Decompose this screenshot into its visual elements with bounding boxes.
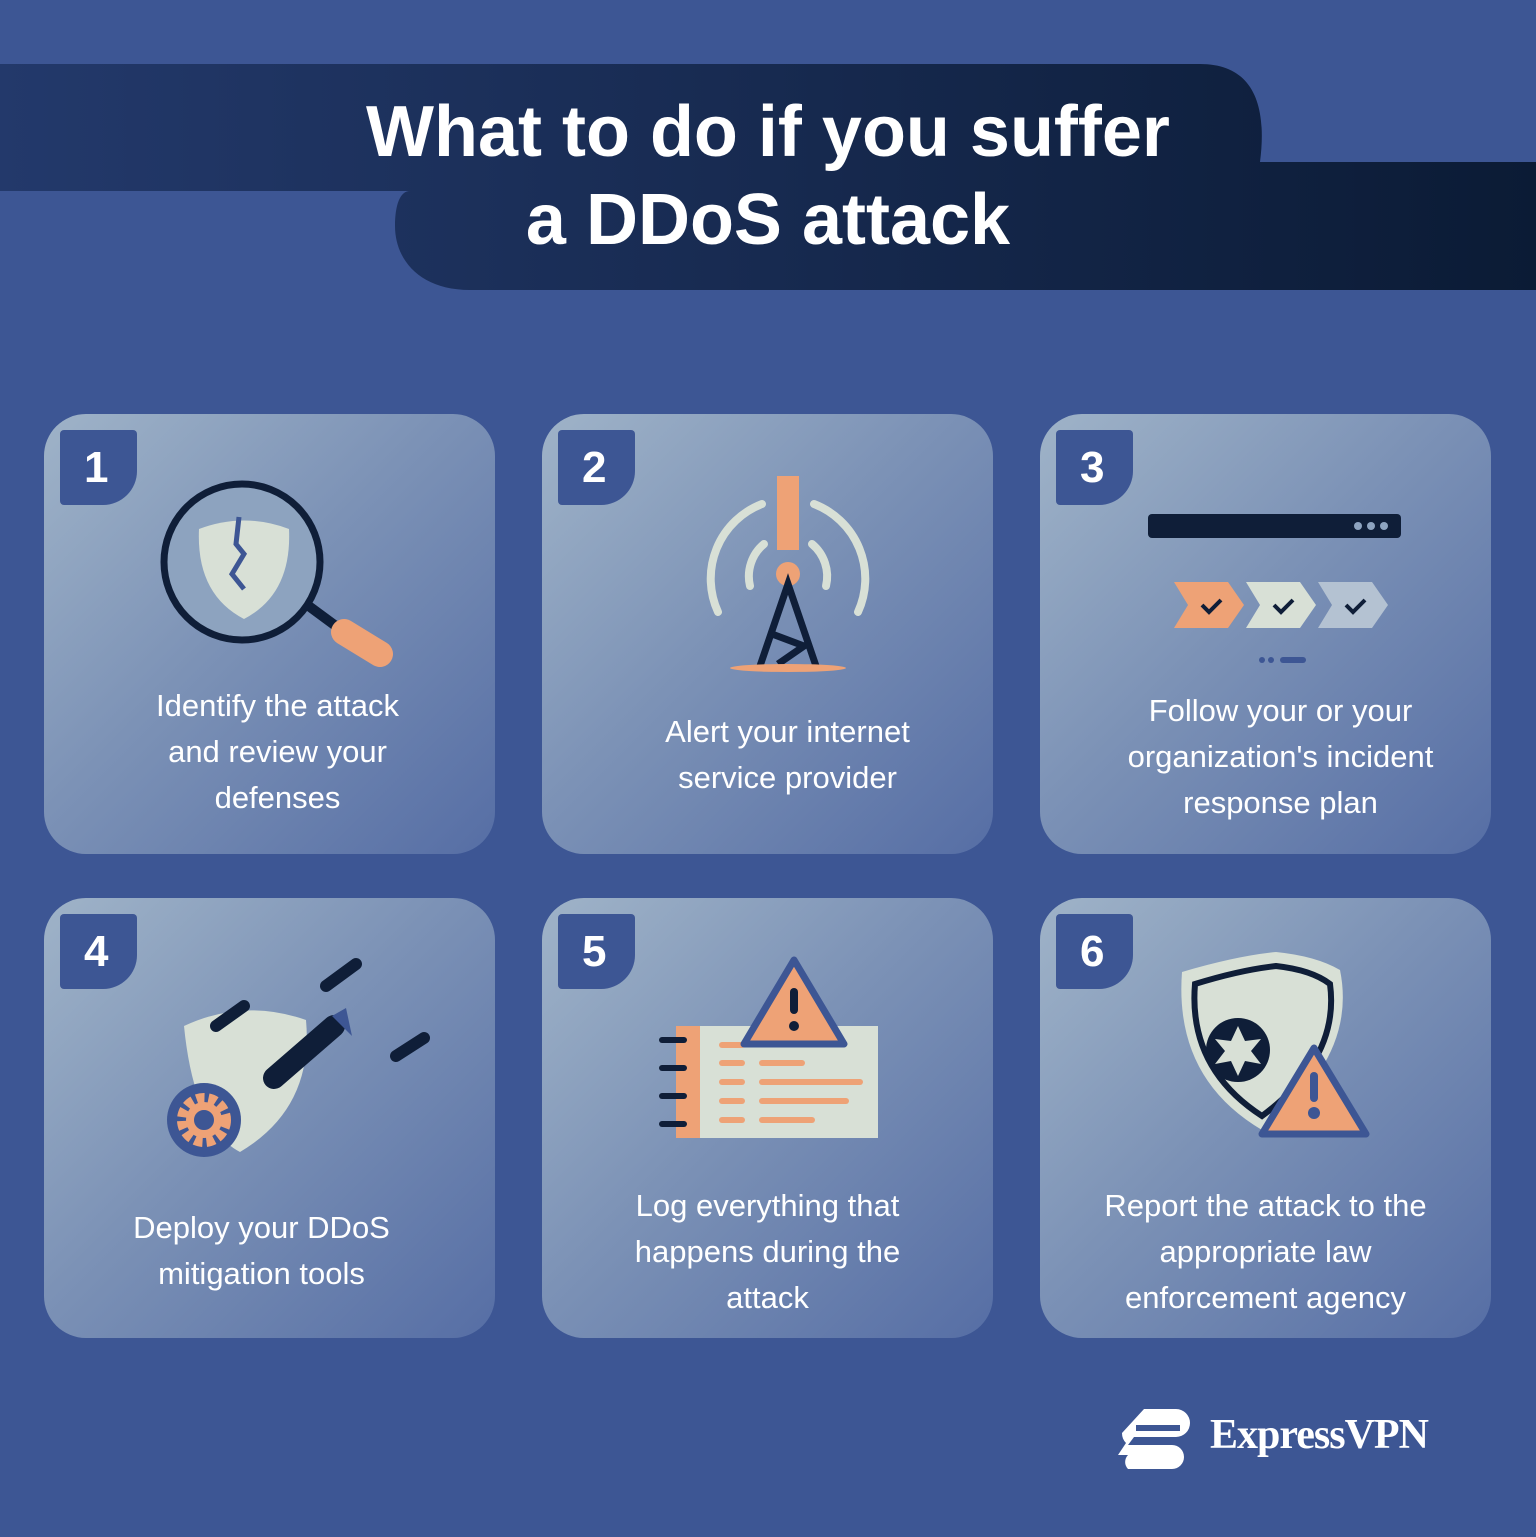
text: happens during the <box>635 1234 900 1269</box>
panel: step 3 <box>1040 414 1491 854</box>
text: appropriate law <box>1160 1234 1371 1269</box>
logo: ExpressVPN: ExpressVPN <box>1210 1412 1428 1458</box>
text: Log everything that <box>636 1188 899 1223</box>
text: defenses <box>215 780 340 815</box>
text: Alert your internet <box>665 714 910 749</box>
panel: step 5: 5 <box>582 927 606 976</box>
logo: ExpressVPN <box>1118 1409 1428 1469</box>
text: enforcement agency <box>1125 1280 1406 1315</box>
icon: antenna alert <box>706 476 870 672</box>
icon: checklist <box>1148 514 1401 663</box>
text <box>1128 693 1434 820</box>
text: organization's incident <box>1128 739 1433 774</box>
panel: step 5 <box>542 898 993 1338</box>
text: mitigation tools <box>158 1256 365 1291</box>
title <box>366 92 1170 260</box>
icon: magnifier shield <box>160 480 393 667</box>
text: and review your <box>168 734 387 769</box>
icon: shield bombs gear <box>167 958 430 1157</box>
panel: step 1 <box>44 414 495 854</box>
text: Follow your or your <box>1149 693 1412 728</box>
text <box>635 1188 900 1315</box>
panel: step 4: 4 <box>84 927 108 976</box>
text: Report the attack to the <box>1104 1188 1427 1223</box>
panel: step 2: 2 <box>582 443 606 492</box>
icon: badge warning <box>1181 952 1370 1138</box>
panel: step 6: 6 <box>1080 927 1104 976</box>
text <box>1104 1188 1427 1315</box>
text: response plan <box>1183 785 1378 820</box>
panel: step 3: 3 <box>1080 443 1104 492</box>
panel: step 1: 1 <box>84 443 108 492</box>
text: attack <box>726 1280 809 1315</box>
text: service provider <box>678 760 897 795</box>
panel: step 6 <box>1040 898 1491 1338</box>
text: Identify the attack <box>156 688 399 723</box>
title banner <box>0 64 1536 290</box>
text <box>133 1210 390 1291</box>
panel: step 2 <box>542 414 993 854</box>
icon: log with warning <box>659 956 878 1138</box>
text <box>665 714 910 795</box>
title: a DDoS attack <box>526 180 1010 260</box>
title: What to do if you suffer <box>366 92 1170 172</box>
text <box>156 688 399 815</box>
text: Deploy your DDoS <box>133 1210 390 1245</box>
panel: step 4 <box>44 898 495 1338</box>
